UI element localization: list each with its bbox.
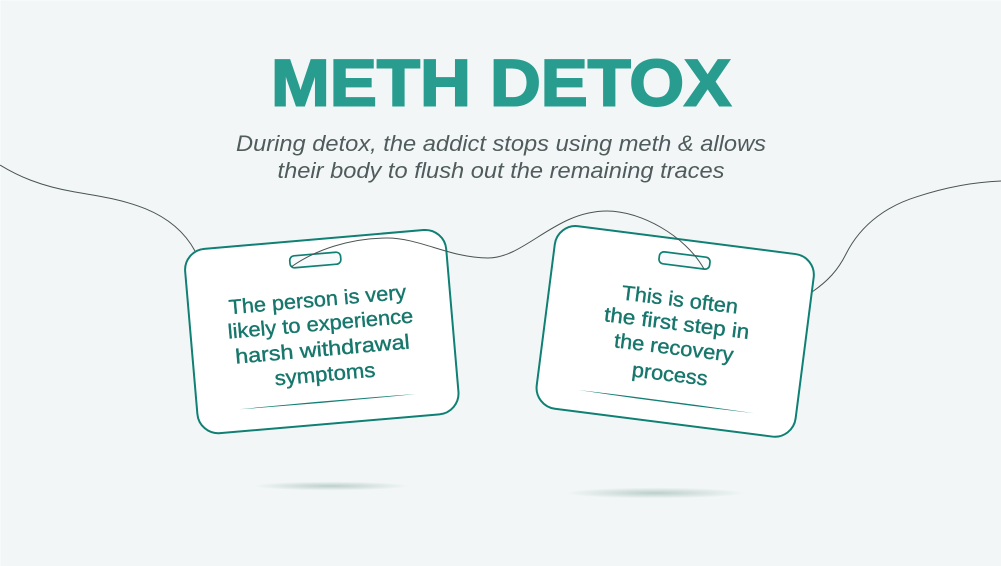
shadow: left card <box>253 482 409 490</box>
right card text <box>603 282 751 391</box>
right card text: the recovery <box>613 329 736 367</box>
right card text: This is often <box>620 282 739 319</box>
icon: left card slot <box>289 252 341 268</box>
panel: right card <box>534 224 816 439</box>
title: DETOX <box>490 47 731 120</box>
right card text: the first step in <box>603 303 751 344</box>
panel: left card <box>183 228 460 435</box>
subtitle: their body to flush out the remaining traces <box>278 158 724 183</box>
connecting string <box>291 211 704 269</box>
left card text <box>227 281 414 390</box>
left card text: The person is very <box>228 281 408 319</box>
right card underline <box>578 390 754 413</box>
icon: right card slot <box>658 251 711 270</box>
title <box>271 47 731 120</box>
subtitle: During detox, the addict stops using meth & allows <box>236 131 766 156</box>
left card text: symptoms <box>274 359 376 390</box>
left card text: harsh withdrawal <box>234 330 411 369</box>
subtitle <box>236 131 766 183</box>
right card text: process <box>631 359 709 391</box>
left card text: likely to experience <box>227 304 414 344</box>
right string <box>812 181 1001 292</box>
title: METH <box>271 47 471 120</box>
shadow: right card <box>565 488 745 498</box>
left string <box>0 165 195 251</box>
left card underline <box>239 394 416 409</box>
